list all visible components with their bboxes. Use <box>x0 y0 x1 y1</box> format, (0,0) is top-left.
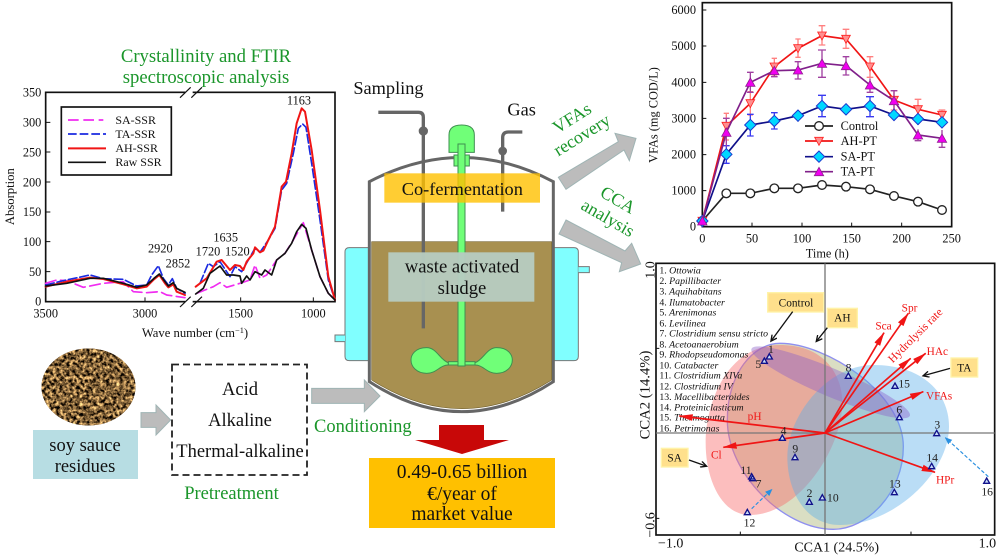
line chart: FTIR absorption spectra: 100 <box>23 235 41 249</box>
line chart: FTIR absorption spectra: Absorption <box>3 168 17 225</box>
legend: genera: 15. Thermogutta <box>659 413 725 424</box>
legend: genera: 5. Arenimonas <box>659 308 716 319</box>
axis labels: −1.0 <box>658 536 683 551</box>
line chart: FTIR absorption spectra: 3500 <box>33 307 58 321</box>
species numbers: 11 <box>740 464 752 477</box>
species numbers: 14 <box>926 452 938 465</box>
CCA ordination plot <box>637 261 996 555</box>
legend: FTIR series: SA-SSR <box>115 113 156 127</box>
legend: genera: 16. Petrimonas <box>659 423 720 434</box>
legend: genera: 14. Proteiniclasticum <box>659 402 744 413</box>
callout: AH: AH <box>834 313 851 325</box>
line chart: VFAs over time: 100 <box>793 231 811 245</box>
species numbers: 15 <box>898 378 910 391</box>
line chart: VFAs over time: Time (h) <box>806 246 849 260</box>
legend: VFAs series: Control <box>841 119 879 133</box>
line chart: VFAs over time: 200 <box>892 231 911 245</box>
line chart: FTIR absorption spectra: 1520 <box>225 245 250 259</box>
vector labels: VFAs <box>926 391 952 403</box>
species numbers: 8 <box>846 362 852 375</box>
callout: SA <box>661 448 706 467</box>
box: market value <box>369 458 555 528</box>
ellipse: control group <box>746 336 915 429</box>
legend: genera: 10. Catabacter <box>659 360 718 371</box>
label: soy sauce residues: soy sauce <box>49 436 121 456</box>
environmental vectors <box>679 313 935 472</box>
line chart: FTIR absorption spectra: 1163 <box>287 93 311 107</box>
legend: genera: 13. Macellibacteroides <box>659 392 750 403</box>
legend: genera: 7. Clostridium sensu stricto <box>659 329 768 340</box>
title: crystallinity and FTIR analysis <box>121 46 292 88</box>
label: pretreatment: Pretreatment <box>184 484 280 504</box>
axis labels: CCA2 (14.4%) <box>637 351 653 439</box>
callout: TA <box>924 358 978 377</box>
label: CCA analysis: CCA <box>597 182 639 218</box>
legend: genera: 8. Acetoanaerobium <box>659 339 739 350</box>
box: pretreatment methods: Acid <box>222 380 259 400</box>
line chart: VFAs over time: 6000 <box>671 3 696 17</box>
legend: genera: 11. Clostridium XIVa <box>659 371 742 382</box>
legend: FTIR series: Raw SSR <box>115 155 162 169</box>
vector labels: HAc <box>927 346 948 358</box>
box: market value: 0.49-0.65 billion <box>397 462 528 483</box>
legend: FTIR series: TA-SSR <box>115 127 156 141</box>
ellipse: AH group <box>727 343 903 529</box>
legend: genera: 6. Levilinea <box>659 318 706 329</box>
line chart: FTIR absorption spectra: 1500 <box>228 307 253 321</box>
labels: sampling and gas: Gas <box>507 100 536 120</box>
species numbers: 1 <box>768 343 774 356</box>
axis labels: 1.0 <box>979 536 996 551</box>
label: soy sauce residues <box>33 430 138 479</box>
species numbers: 2 <box>807 487 813 500</box>
vector labels: pH <box>748 411 762 423</box>
line chart: VFAs over time: 1000 <box>671 184 696 198</box>
legend: genera: 12. Clostridium IV <box>659 381 734 392</box>
legend: VFAs series: TA-PT <box>841 165 875 179</box>
species numbers: 16 <box>981 485 993 498</box>
vessel body <box>369 157 553 412</box>
gas pipe <box>498 132 522 212</box>
legend: VFAs series: SA-PT <box>841 150 875 164</box>
vector labels: Cl <box>711 450 722 462</box>
callout: Control <box>768 293 824 341</box>
box: market value: €/year of <box>427 484 497 505</box>
label: co-fermentation <box>384 173 540 203</box>
line chart: FTIR absorption spectra: 0 <box>35 295 41 309</box>
title: crystallinity and FTIR analysis: Crystallinity and FTIR <box>121 46 292 67</box>
arrow: to VFAs recovery <box>558 133 636 189</box>
label: waste activated sludge: waste activated <box>405 257 520 278</box>
line chart: VFAs over time: 0 <box>699 231 705 245</box>
line chart: VFAs over time: 50 <box>746 231 758 245</box>
line chart: FTIR absorption spectra: ) <box>244 326 248 340</box>
label: co-fermentation: Co-fermentation <box>402 179 523 199</box>
box: pretreatment methods <box>172 364 307 475</box>
label: VFAs recovery: recovery <box>550 110 614 160</box>
arrow: to CCA analysis <box>559 220 641 272</box>
line chart: FTIR absorption spectra: 3000 <box>133 307 157 321</box>
species numbers: 9 <box>792 442 798 455</box>
vector labels: Sca <box>875 320 892 332</box>
line chart: VFAs over time: 150 <box>842 231 861 245</box>
line chart: FTIR absorption spectra: 1635 <box>213 231 238 245</box>
line chart: VFAs over time: 5000 <box>671 39 696 53</box>
line chart: FTIR absorption spectra: −1 <box>235 326 244 335</box>
line chart: VFAs over time <box>646 3 961 260</box>
line chart: VFAs over time: 3000 <box>671 111 696 125</box>
sampling pipe <box>378 112 428 328</box>
arrow: residues to pretreatment <box>141 405 171 435</box>
line chart: FTIR absorption spectra: 150 <box>23 205 41 219</box>
line chart: FTIR absorption spectra: 200 <box>23 175 41 189</box>
label: CCA analysis: analysis <box>578 195 638 241</box>
legend: VFAs series: AH-PT <box>841 134 877 148</box>
ellipse: SA group <box>706 345 842 515</box>
label: waste activated sludge: sludge <box>438 278 486 299</box>
title: crystallinity and FTIR analysis: spectroscopic analysis <box>123 67 289 88</box>
line chart: FTIR absorption spectra: 2920 <box>148 242 173 256</box>
line chart: FTIR absorption spectra: 1720 <box>196 245 220 259</box>
legend: genera: 3. Aquihabitans <box>659 287 722 298</box>
axis labels <box>637 261 996 555</box>
line chart: VFAs over time: VFAs (mg COD/L) <box>646 67 660 163</box>
photo: soy sauce residues <box>42 348 136 426</box>
vector labels: Hydrolysis rate <box>886 306 945 365</box>
vector labels: Spr <box>902 303 918 315</box>
cooling jacket <box>335 248 589 361</box>
stirrer <box>411 125 512 373</box>
line chart: FTIR absorption spectra: 250 <box>23 145 41 159</box>
legend: FTIR series: AH-SSR <box>115 141 158 155</box>
box: pretreatment methods: Thermal-alkaline <box>176 442 304 462</box>
sludge liquid <box>372 242 552 409</box>
line chart: VFAs over time: 0 <box>690 220 696 234</box>
species numbers: 5 <box>755 358 761 371</box>
legend: genera: 1. Ottowia <box>659 266 701 277</box>
species numbers: 12 <box>744 517 755 530</box>
ellipse: TA group <box>787 365 949 525</box>
legend: genera: 9. Rhodopseudomonas <box>659 350 749 361</box>
vector labels: HPr <box>936 475 954 487</box>
line chart: FTIR absorption spectra: 1000 <box>301 307 326 321</box>
reactor: co-fermentation vessel <box>335 78 589 412</box>
dashed movement arrows <box>752 438 988 509</box>
callout: AH <box>817 308 857 341</box>
line chart: FTIR absorption spectra: 300 <box>23 115 41 129</box>
line chart: FTIR absorption spectra: Wave number (cm <box>142 326 235 340</box>
legend: genera: 2. Papillibacter <box>659 276 721 287</box>
species numbers: 6 <box>896 403 902 416</box>
labels: sampling and gas: Sampling <box>353 78 424 98</box>
line chart: FTIR absorption spectra <box>3 86 335 340</box>
species markers <box>744 354 990 515</box>
vector labels <box>711 303 954 487</box>
labels: sampling and gas <box>353 78 536 120</box>
axis labels: 1.0 <box>644 261 659 279</box>
species numbers: 13 <box>889 478 901 491</box>
species numbers: 10 <box>827 491 839 504</box>
arrow: market value down <box>415 425 509 454</box>
legend: VFAs series <box>805 119 879 179</box>
axis labels: −0.6 <box>644 512 659 538</box>
species numbers: 7 <box>756 478 762 491</box>
box: market value: market value <box>411 504 513 525</box>
species numbers <box>740 343 993 530</box>
line chart: FTIR absorption spectra: 50 <box>29 265 41 279</box>
callout: SA: SA <box>667 453 683 465</box>
line chart: FTIR absorption spectra: 350 <box>23 86 41 100</box>
label: soy sauce residues: residues <box>55 457 115 477</box>
line chart: VFAs over time: 250 <box>942 231 961 245</box>
label: waste activated sludge <box>388 252 534 302</box>
legend: FTIR series <box>61 107 171 175</box>
arrow: conditioning <box>312 380 380 412</box>
line chart: VFAs over time: 2000 <box>671 148 696 162</box>
callout: Control: Control <box>779 297 813 309</box>
label: VFAs recovery: VFAs <box>549 98 595 137</box>
species numbers: 4 <box>781 424 787 437</box>
legend: genera: 4. Ilumatobacter <box>659 297 725 308</box>
line chart: VFAs over time: 4000 <box>671 75 696 89</box>
line chart: FTIR absorption spectra: 2852 <box>166 257 190 271</box>
callout: TA: TA <box>957 363 972 375</box>
species numbers: 3 <box>934 419 940 432</box>
box: pretreatment methods: Alkaline <box>208 411 272 431</box>
legend: genera <box>659 266 768 434</box>
label: conditioning: Conditioning <box>314 417 412 437</box>
